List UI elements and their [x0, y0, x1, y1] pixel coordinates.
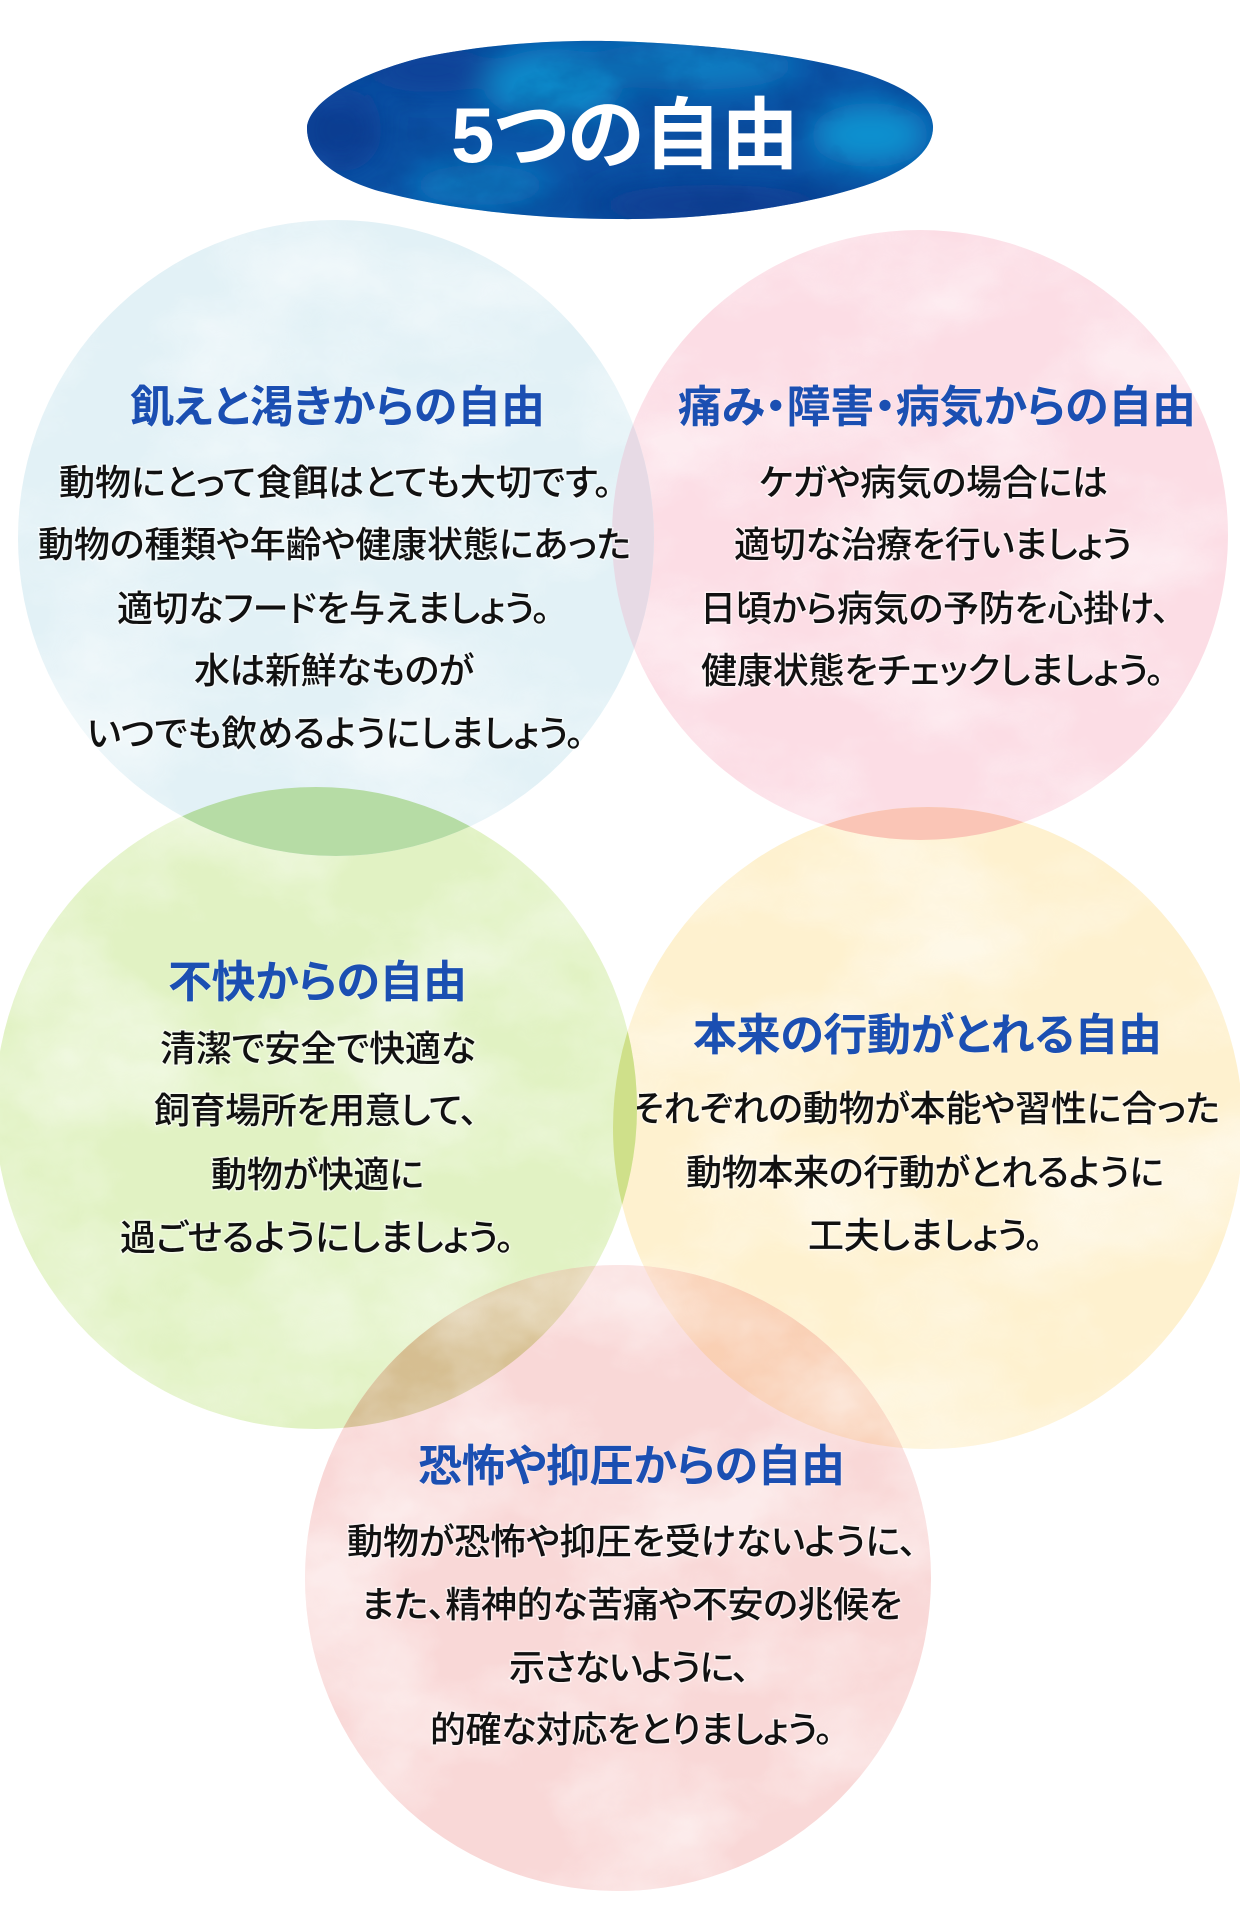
- body text: 飼育場所を用意して、: [154, 1090, 478, 1131]
- overlap with pink circle: [612, 425, 654, 648]
- body text: 動物にとって食餌はとても大切です。: [59, 462, 612, 503]
- body text: [38, 462, 631, 754]
- body text: [120, 1028, 514, 1258]
- body text: いつでも飲めるようにしましょう。: [87, 713, 584, 754]
- body text: [700, 462, 1170, 691]
- panel: fear and distress: [305, 1265, 931, 1891]
- body text: 動物の種類や年齢や健康状態にあった: [38, 524, 631, 565]
- heading: hunger and thirst: 飢えと渇きからの自由: [130, 383, 545, 432]
- body text: 動物本来の行動がとれるように: [686, 1152, 1164, 1193]
- body text: 日頃から病気の予防を心掛け、: [700, 588, 1170, 629]
- body text: 適切な治療を行いましょう: [734, 524, 1132, 565]
- panel: natural behaviour: [613, 807, 1240, 1449]
- body text: 示さないように、: [509, 1647, 750, 1688]
- body text: 清潔で安全で快適な: [160, 1028, 476, 1069]
- body text: それぞれの動物が本能や習性に合った: [631, 1088, 1220, 1129]
- body text: 水は新鮮なものが: [194, 650, 475, 691]
- title text: 5つの自由: [451, 91, 799, 179]
- panel: discomfort: [0, 787, 637, 1429]
- body text: [631, 1088, 1220, 1256]
- body text: 工夫しましょう。: [808, 1215, 1043, 1256]
- body text: ケガや病気の場合には: [759, 462, 1108, 503]
- body text: 動物が恐怖や抑圧を受けないように、: [347, 1521, 917, 1562]
- heading: natural behaviour: 本来の行動がとれる自由: [693, 1011, 1162, 1060]
- overlap with yellow circle: [644, 1266, 902, 1448]
- yellow circle background: [613, 807, 1240, 1449]
- overlap with green circle: [182, 787, 470, 856]
- pink circle background: [612, 230, 1228, 840]
- panel: hunger and thirst: [18, 220, 654, 856]
- overlap with yellow circle: [613, 1031, 637, 1204]
- overlap with green circle: [344, 1266, 596, 1428]
- title banner: [298, 35, 940, 225]
- heading: pain, injury and disease: 痛み・障害・病気からの自由: [678, 383, 1196, 432]
- green circle background: [0, 787, 637, 1429]
- heading: fear and distress: 恐怖や抑圧からの自由: [418, 1442, 845, 1491]
- blue circle background: [18, 220, 654, 856]
- watercolour oval: [298, 35, 940, 225]
- body text: 適切なフードを与えましょう。: [117, 588, 550, 629]
- rose circle background: [305, 1265, 931, 1891]
- body text: 健康状態をチェックしましょう。: [701, 650, 1164, 691]
- body text: また、精神的な苦痛や不安の兆候を: [361, 1584, 902, 1625]
- body text: 過ごせるようにしましょう。: [120, 1217, 514, 1258]
- body text: 的確な対応をとりましょう。: [430, 1709, 833, 1750]
- panel: pain, injury and disease: [612, 230, 1228, 840]
- overlap with pink circle: [824, 807, 1024, 840]
- heading: discomfort: 不快からの自由: [168, 958, 467, 1007]
- body text: [347, 1521, 917, 1750]
- body text: 動物が快適に: [211, 1154, 424, 1195]
